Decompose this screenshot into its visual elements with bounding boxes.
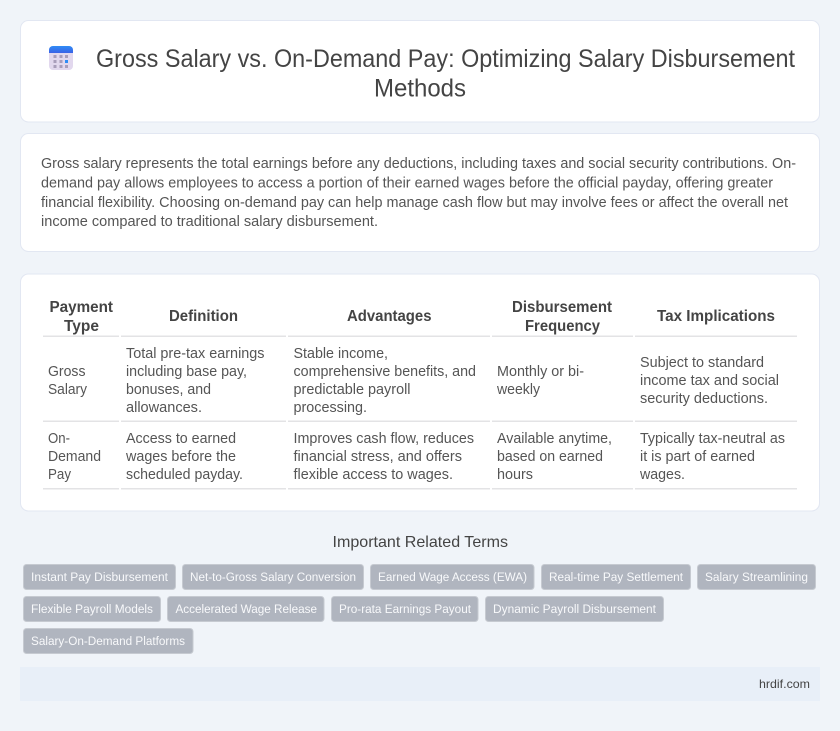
table header row: Disbursement xyxy=(512,299,613,316)
table row: On-Demand Pay: On- xyxy=(48,431,70,447)
table row: On-Demand Pay: wages. xyxy=(639,467,685,483)
table row: Gross Salary: Gross xyxy=(48,364,86,380)
summary text: income compared to traditional salary disbursement. xyxy=(41,214,378,230)
summary text: financial flexibility. Choosing on-demand pay can help manage cash flow but may involve fees or affect the overall net xyxy=(41,195,788,211)
tag: Salary Streamlining xyxy=(698,564,816,590)
table row: On-Demand Pay xyxy=(48,431,785,483)
heading: important related terms: Important Related Terms xyxy=(332,534,508,551)
table row: On-Demand Pay: Demand xyxy=(48,449,101,465)
tag: Instant Pay Disbursement xyxy=(24,564,176,590)
table row: Gross Salary: Salary xyxy=(48,382,88,398)
tag: Salary-On-Demand Platforms: Salary-On-Demand Platforms xyxy=(31,634,185,648)
title: Gross Salary vs. On-Demand Pay: Optimizing Salary Disbursement xyxy=(96,45,795,73)
table row: Gross Salary: comprehensive benefits, and xyxy=(294,364,476,380)
table header row: Tax Implications xyxy=(657,308,775,325)
table row: On-Demand Pay: based on earned xyxy=(497,449,603,465)
tag: Dynamic Payroll Disbursement: Dynamic Payroll Disbursement xyxy=(493,602,657,616)
table row: Gross Salary: allowances. xyxy=(126,400,202,416)
panel: summary xyxy=(20,134,820,252)
tag: Pro-rata Earnings Payout xyxy=(332,596,478,622)
tag: Accelerated Wage Release xyxy=(168,596,324,622)
tag: Dynamic Payroll Disbursement xyxy=(486,596,664,622)
tag: Flexible Payroll Models: Flexible Payroll Models xyxy=(31,602,153,616)
table row: Gross Salary: Stable income, xyxy=(294,346,388,362)
tag: Real-time Pay Settlement: Real-time Pay Settlement xyxy=(549,570,684,584)
table row: On-Demand Pay: scheduled payday. xyxy=(126,467,243,483)
table row: Gross Salary: predictable payroll xyxy=(294,382,410,398)
table row: On-Demand Pay: Access to earned xyxy=(126,431,236,447)
icon: calendar xyxy=(49,46,73,70)
tag: Instant Pay Disbursement: Instant Pay Disbursement xyxy=(31,570,169,584)
panel: header xyxy=(20,20,820,122)
tag: Real-time Pay Settlement xyxy=(542,564,690,590)
table row: On-Demand Pay: Typically tax-neutral as xyxy=(640,431,785,447)
footer: hrdif.com xyxy=(759,677,810,691)
table row: On-Demand Pay: Available anytime, xyxy=(497,431,612,447)
footer xyxy=(20,667,820,701)
related term tags xyxy=(24,564,816,654)
title: Methods xyxy=(374,74,466,102)
table header row: Payment xyxy=(50,299,114,316)
panel: comparison table xyxy=(20,274,820,511)
table header row: Frequency xyxy=(525,318,600,335)
table header row xyxy=(50,299,775,335)
table row: On-Demand Pay: Pay xyxy=(48,467,72,483)
table row: On-Demand Pay: wages before the xyxy=(125,449,236,465)
table row: On-Demand Pay: flexible access to wages. xyxy=(294,467,453,483)
table row: On-Demand Pay: hours xyxy=(497,467,533,483)
summary text: demand pay allows employees to access a portion of their earned wages before the official payday, offering greater xyxy=(41,176,773,192)
tag: Net-to-Gross Salary Conversion: Net-to-Gross Salary Conversion xyxy=(190,570,356,584)
table row: Gross Salary: Subject to standard xyxy=(640,355,764,371)
table row: On-Demand Pay: it is part of earned xyxy=(640,449,755,465)
table header row: Definition xyxy=(169,308,238,325)
table row: Gross Salary: processing. xyxy=(294,400,367,416)
tag: Pro-rata Earnings Payout: Pro-rata Earnings Payout xyxy=(339,602,472,616)
table header row: Type xyxy=(64,318,99,335)
table row: Gross Salary: Total pre-tax earnings xyxy=(126,346,264,362)
table row: Gross Salary: income tax and social xyxy=(640,373,779,389)
table row: Gross Salary: including base pay, xyxy=(126,364,247,380)
title xyxy=(96,45,795,102)
summary text xyxy=(41,156,796,230)
table row: Gross Salary xyxy=(48,346,779,416)
tag: Flexible Payroll Models xyxy=(24,596,160,622)
tag: Salary Streamlining: Salary Streamlining xyxy=(705,570,808,584)
table row: Gross Salary: bonuses, and xyxy=(126,382,211,398)
table row: Gross Salary: weekly xyxy=(496,382,541,398)
tag: Salary-On-Demand Platforms xyxy=(24,628,193,654)
summary text: Gross salary represents the total earnings before any deductions, including taxes and social security contributions. On- xyxy=(41,156,796,172)
tag: Net-to-Gross Salary Conversion xyxy=(182,564,364,590)
tag: Earned Wage Access: Earned Wage Access (EWA) xyxy=(378,570,527,584)
tag: Accelerated Wage Release: Accelerated Wage Release xyxy=(176,602,317,616)
table row: On-Demand Pay: Improves cash flow, reduces xyxy=(294,431,474,447)
tag: Earned Wage Access xyxy=(370,564,534,590)
table header row: Advantages xyxy=(347,308,432,325)
table row: On-Demand Pay: financial stress, and offers xyxy=(294,449,462,465)
table row: Gross Salary: Monthly or bi- xyxy=(497,364,584,380)
table row: Gross Salary: security deductions. xyxy=(640,391,768,407)
